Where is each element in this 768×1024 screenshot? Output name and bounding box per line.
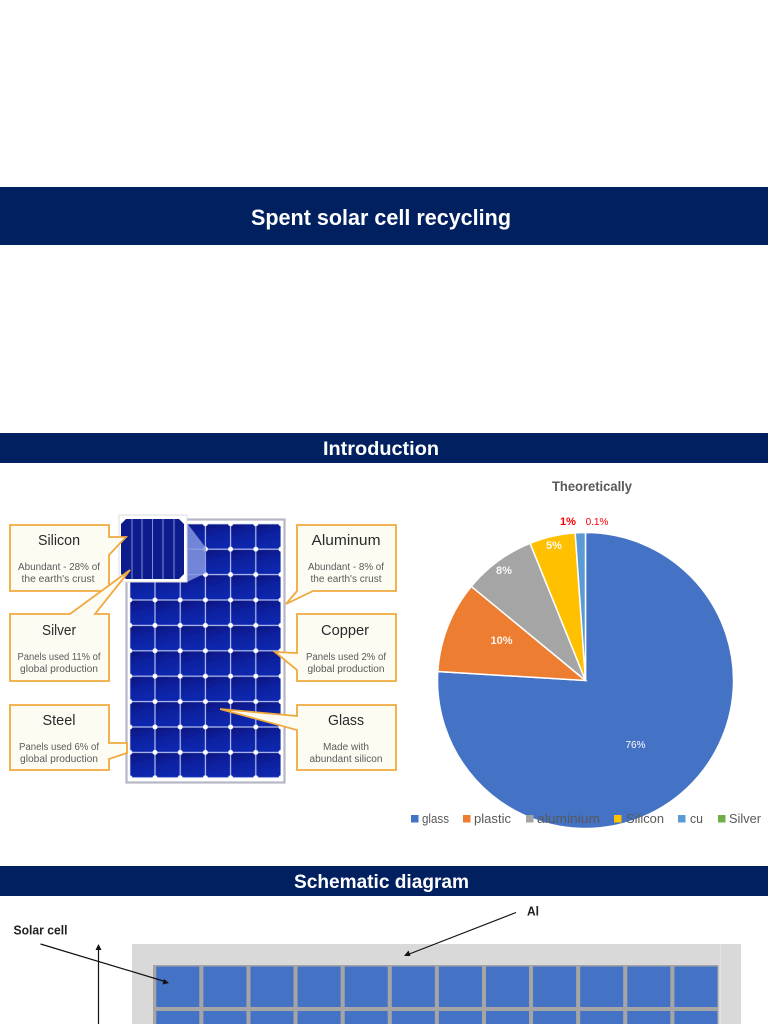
callout: Copper: [275, 614, 396, 681]
callout: Steel: Panels used 6% of: [19, 742, 99, 753]
schematic: aluminium frame and cells: [132, 944, 741, 1024]
section heading: Schematic diagram: [0, 866, 768, 896]
pie data labels: [490, 516, 646, 751]
callout: Silicon: the earth's crust: [22, 574, 95, 585]
slice: silicon: [530, 533, 586, 680]
callout: Steel: global production: [20, 754, 98, 765]
pie data labels: 1%: [560, 516, 576, 528]
pie data labels: 76%: [625, 740, 646, 751]
callout: Steel: Steel: [42, 713, 76, 729]
solar panel photo: [126, 520, 284, 782]
callout: Glass: Glass: [328, 713, 364, 729]
callout: Glass: abundant silicon: [310, 754, 382, 765]
arrow: Al pointer: [404, 912, 516, 956]
callout: Aluminum: [286, 525, 396, 604]
chart legend: aluminium: [537, 811, 600, 826]
section heading: Introduction: Introduction: [323, 439, 439, 460]
label: Solar cell: Solar cell: [14, 922, 68, 938]
callout: Aluminum: Abundant - 8% of: [308, 562, 384, 573]
chart legend: Silicon: [626, 811, 664, 826]
panel: solar panel materials diagram: [10, 515, 396, 782]
callout: Steel: [10, 705, 127, 770]
chart title: Theoretically: Theoretically: [552, 478, 632, 494]
arrow: vertical axis: [96, 944, 102, 1024]
slice: glass: [438, 532, 734, 829]
callout: Silicon: Silicon: [38, 533, 80, 549]
title banner: [0, 187, 768, 245]
callout: Glass: [220, 705, 396, 770]
callout: Silver: [10, 570, 130, 681]
callout: Aluminum: Aluminum: [312, 533, 380, 549]
callout: Copper: Panels used 2% of: [306, 652, 386, 663]
callout: Silicon: [10, 525, 126, 591]
pie data labels: 5%: [546, 540, 562, 552]
callout: Glass: Made with: [323, 742, 369, 753]
slice: aluminium: [471, 543, 586, 680]
inset: silicon cell closeup: [119, 515, 187, 582]
pie chart: [438, 532, 734, 829]
callout: Silver: global production: [20, 664, 98, 675]
chart legend: [411, 811, 762, 826]
arrow: solar cell pointer: [40, 944, 169, 984]
callout: Copper: Copper: [321, 623, 369, 639]
pie data labels: 10%: [490, 635, 513, 647]
slice: plastic: [438, 586, 586, 680]
callout: Silver: Silver: [42, 623, 76, 639]
chart legend: glass: [422, 811, 449, 826]
section heading: Introduction: [0, 433, 768, 463]
callout: Aluminum: the earth's crust: [310, 574, 382, 585]
slice: cu: [575, 532, 586, 680]
label: Al: Al: [527, 904, 539, 918]
callout: Silver: Panels used 11% of: [18, 652, 101, 663]
pie data labels: 8%: [496, 565, 512, 577]
chart legend: Silver: [729, 811, 762, 826]
callout: Silicon: Abundant - 28% of: [18, 562, 100, 573]
callout: Copper: global production: [308, 664, 384, 675]
pie data labels: 0.1%: [586, 517, 609, 528]
chart legend: plastic: [474, 811, 511, 826]
chart legend: cu: [690, 811, 703, 826]
zoom wedge: [187, 523, 206, 582]
section heading: Schematic diagram: Schematic diagram: [294, 872, 469, 893]
title banner: Spent solar cell recycling: [251, 205, 511, 230]
